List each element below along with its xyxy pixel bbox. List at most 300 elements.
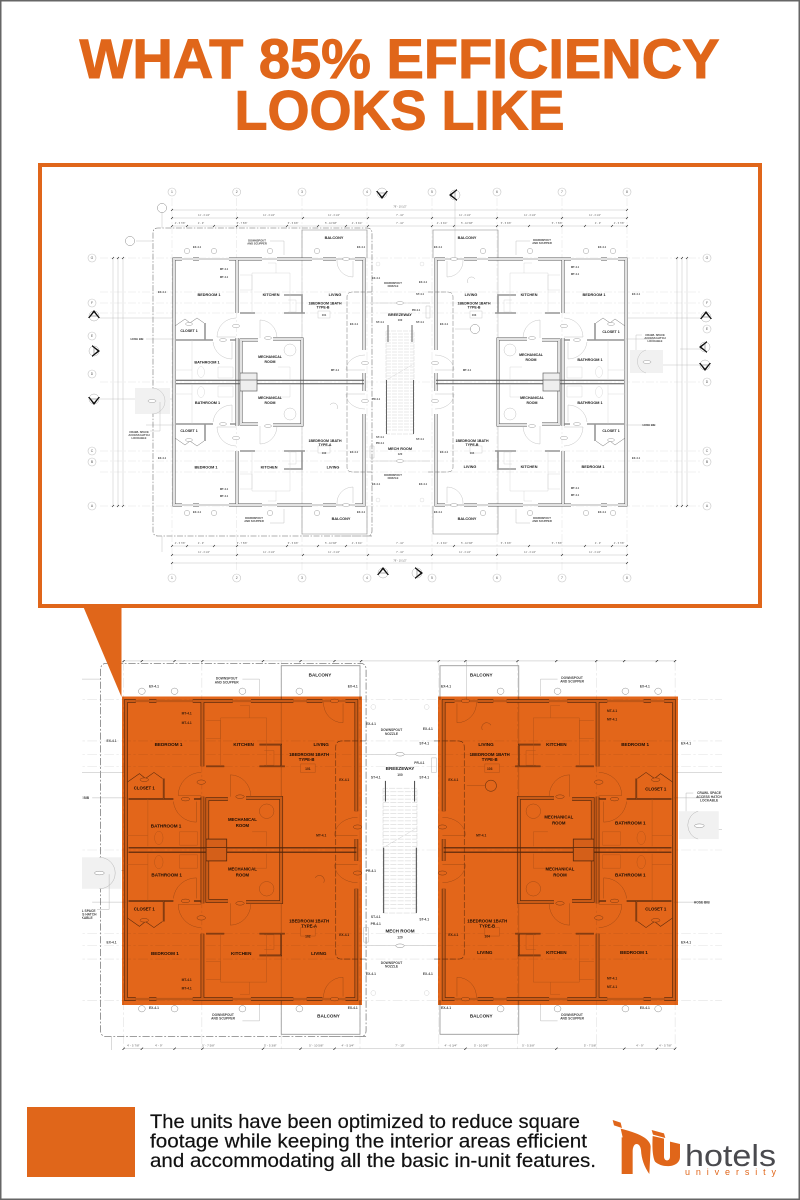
zoomed floor plan text labels: 1BEDROOM 1BATH bbox=[289, 919, 329, 924]
orange highlight: left units bbox=[122, 696, 362, 1005]
zoomed floor plan text labels: BEDROOM 1 bbox=[620, 950, 648, 955]
zoomed floor plan text labels: EX-4.1 bbox=[348, 1006, 358, 1010]
floor plan text labels: NOZZLE bbox=[388, 476, 399, 480]
zoomed floor plan text labels: EX-4.1 bbox=[441, 1006, 451, 1010]
zoomed floor plan text labels: CRAWL SPACE bbox=[72, 909, 96, 913]
zoomed floor plan text labels: MECHANICAL bbox=[228, 867, 257, 872]
floor plan text labels: 4' - 9" bbox=[595, 542, 601, 545]
floor plan text labels: 1 bbox=[171, 576, 173, 580]
floor plan text labels: ACCESS HATCH bbox=[644, 336, 666, 340]
floor plan text labels bbox=[91, 190, 709, 580]
floor plan text labels: EX-4.1 bbox=[434, 510, 443, 514]
floor plan text labels: EX-4.1 bbox=[598, 510, 607, 514]
zoomed floor plan text labels: EX-4.1 bbox=[681, 742, 691, 746]
floor plan text labels: EX-4.1 bbox=[357, 245, 366, 249]
floor plan text labels: EX-4.1 bbox=[632, 456, 641, 460]
zoomed floor plan text labels: 7' - 10" bbox=[395, 1043, 405, 1047]
zoomed floor plan text labels: EX-4.1 bbox=[107, 940, 117, 944]
zoomed floor plan text labels: BATHROOM 1 bbox=[151, 824, 182, 829]
zoomed floor plan text labels: PR-4.1 bbox=[366, 869, 376, 873]
zoomed floor plan text labels: EX-4.1 bbox=[366, 722, 376, 726]
floor plan text labels: 5' - 5 3/8" bbox=[288, 222, 298, 225]
zoomed floor plan text labels: BATHROOM 1 bbox=[615, 821, 646, 826]
floor plan text labels: CLOSET 1 bbox=[602, 429, 620, 433]
floor plan text labels: ROOM bbox=[264, 360, 276, 364]
logo wordmark: hotels bbox=[685, 1138, 776, 1173]
zoomed floor plan text labels: TYPE-B bbox=[482, 757, 498, 762]
zoomed floor plan text labels: MECHANICAL bbox=[544, 814, 574, 819]
zoomed floor plan text labels: 103 bbox=[487, 767, 493, 771]
zoomed floor plan text labels: 120 bbox=[397, 935, 403, 939]
zoomed floor plan text labels: BALCONY bbox=[309, 673, 331, 678]
zoomed floor plan text labels: EX-4.1 bbox=[423, 972, 433, 976]
floor plan text labels: D bbox=[91, 372, 94, 376]
floor plan text labels: EX-4.1 bbox=[158, 456, 167, 460]
zoomed floor plan text labels: BALCONY bbox=[470, 1013, 493, 1018]
zoomed floor plan text labels: BATHROOM 1 bbox=[151, 873, 182, 878]
zoomed floor plan text labels: KITCHEN bbox=[546, 950, 567, 955]
floor plan text labels: LIVING bbox=[465, 293, 477, 297]
zoomed floor plan text labels bbox=[71, 673, 723, 1047]
floor plan text labels: 8 bbox=[626, 190, 628, 194]
callout pointer bbox=[83, 606, 122, 697]
floor plan text labels: 1 bbox=[171, 190, 173, 194]
zoomed floor plan text labels: 101 bbox=[305, 767, 311, 771]
zoomed floor plan text labels: CLOSET 1 bbox=[645, 787, 667, 792]
floor plan text labels: BATHROOM 1 bbox=[194, 360, 220, 364]
floor plan text labels: CRAWL SPACE bbox=[129, 430, 149, 434]
floor plan text labels: 7' - 10" bbox=[396, 214, 404, 217]
zoomed floor plan text labels: KITCHEN bbox=[546, 742, 567, 747]
floor plan text labels: 5' - 5 3/8" bbox=[288, 542, 298, 545]
floor plan text labels: LOCKABLE bbox=[648, 339, 663, 343]
floor plan text labels: EX-4.1 bbox=[372, 276, 381, 280]
floor plan text labels: PR-4.1 bbox=[376, 441, 385, 445]
zoomed floor plan text labels: 4' - 5 7/8" bbox=[127, 1043, 140, 1047]
floor plan text labels: AND SCUPPER bbox=[244, 519, 264, 523]
floor plan text labels: 4 bbox=[366, 576, 368, 580]
zoomed floor plan text labels: MT-4.1 bbox=[182, 721, 192, 725]
title: WHAT 85% EFFICIENCY bbox=[80, 27, 720, 90]
floor plan text labels: 4' - 5 3/4" bbox=[352, 542, 362, 545]
zoomed floor plan text labels: ACCESS HATCH bbox=[696, 795, 723, 799]
floor plan text labels: 11' - 3 1/4" bbox=[328, 214, 340, 217]
floor plan text labels: 4' - 6 3/4" bbox=[437, 222, 447, 225]
floor plan text labels: ST-4.1 bbox=[416, 320, 424, 324]
zoomed floor plan text labels: LOCKABLE bbox=[75, 916, 94, 920]
zoomed floor plan text labels: LOCKABLE bbox=[700, 799, 719, 803]
floor plan text labels: 104 bbox=[470, 451, 475, 455]
zoomed floor plan text labels: BEDROOM 1 bbox=[151, 951, 179, 956]
floor plan text labels: 5' - 5 3/8" bbox=[501, 542, 511, 545]
floor plan text labels: EX-4.1 bbox=[440, 450, 449, 454]
floor plan text labels: PR-4.1 bbox=[372, 397, 381, 401]
zoomed floor plan text labels: MT-4.1 bbox=[182, 986, 192, 990]
floor plan text labels: ST-4.1 bbox=[416, 437, 424, 441]
floor plan text labels: TYPE-B bbox=[465, 443, 479, 447]
floor plan text labels: 79' - 10 1/2" bbox=[393, 206, 407, 208]
floor plan text labels: BEDROOM 1 bbox=[194, 466, 218, 470]
floor plan text labels: 5' - 10 5/8" bbox=[325, 222, 337, 225]
floor plan text labels: A bbox=[706, 504, 709, 508]
zoomed floor plan text labels: MT-4.1 bbox=[607, 717, 617, 721]
floor plan text labels: EX-4.1 bbox=[158, 290, 167, 294]
floor plan text labels: LIVING bbox=[464, 465, 476, 469]
floor plan text labels: NOZZLE bbox=[388, 284, 399, 288]
zoomed floor plan text labels: KITCHEN bbox=[233, 742, 255, 747]
zoomed floor plan text labels: KITCHEN bbox=[231, 951, 252, 956]
floor plan text labels: MT-4.1 bbox=[571, 486, 580, 490]
zoomed floor plan text labels: TYPE-A bbox=[301, 924, 317, 929]
floor plan text labels: BEDROOM 1 bbox=[582, 465, 604, 469]
floor plan text labels: EX-4.1 bbox=[350, 450, 359, 454]
floor plan text labels: 11' - 3 1/4" bbox=[459, 214, 471, 217]
zoomed floor plan text labels: ROOM bbox=[552, 821, 566, 826]
zoomed floor plan text labels: BATHROOM 1 bbox=[615, 873, 646, 878]
zoomed floor plan text labels: ROOM bbox=[236, 823, 250, 828]
floor plan text labels: 101 bbox=[322, 313, 327, 317]
zoomed floor plan text labels: ROOM bbox=[236, 873, 250, 878]
floor plan text labels: EX-4.1 bbox=[350, 322, 359, 326]
zoomed floor plan text labels: MT-4.1 bbox=[607, 985, 617, 989]
floor plan text labels: EX-4.1 bbox=[372, 482, 381, 486]
floor plan text labels: C bbox=[706, 449, 709, 453]
zoomed floor plan text labels: PR-4.1 bbox=[371, 922, 381, 926]
zoomed floor plan text labels: NOZZLE bbox=[385, 965, 399, 969]
floor plan text labels: LIVING bbox=[327, 466, 339, 470]
floor plan text labels: 1BEDROOM 1BATH bbox=[308, 302, 342, 306]
floor plan text labels: 100 bbox=[398, 318, 403, 322]
zoomed floor plan text labels: MT-4.1 bbox=[316, 834, 326, 838]
panel frame: orange outline bbox=[40, 165, 760, 606]
zoomed floor plan text labels: EX-4.1 bbox=[448, 778, 459, 782]
floor plan text labels: EX-4.1 bbox=[193, 510, 202, 514]
floor plan text labels: 5' - 10 5/8" bbox=[325, 542, 337, 545]
zoomed floor plan text labels: ST-4.1 bbox=[419, 917, 429, 921]
floor plan text labels: 11' - 3 1/4" bbox=[328, 551, 340, 554]
floor plan text labels: CLOSET 1 bbox=[180, 429, 198, 433]
zoomed floor plan text labels: HOSE BIB bbox=[694, 900, 710, 904]
floor plan text labels: 1BEDROOM 1BATH bbox=[457, 302, 491, 306]
title bbox=[80, 27, 720, 142]
zoomed floor plan text labels: TYPE-B bbox=[479, 924, 495, 929]
floor plan text labels: 4' - 6 3/4" bbox=[437, 542, 447, 545]
zoomed floor plan text labels: BREEZEWAY bbox=[386, 766, 414, 771]
floor plan text labels: CLOSET 1 bbox=[180, 329, 198, 333]
zoomed floor plan text labels: PR-4.1 bbox=[414, 761, 425, 765]
zoomed floor plan text labels: AND SCUPPER bbox=[211, 1017, 236, 1021]
zoomed floor plan text labels: 102 bbox=[305, 934, 311, 938]
floor plan text labels: AND SCUPPER bbox=[532, 241, 552, 245]
panel: zoomed floor plan with highlighted units bbox=[82, 660, 722, 1050]
zoomed floor plan text labels: DOWNSPOUT bbox=[381, 961, 402, 965]
floor plan text labels: 4' - 9" bbox=[198, 222, 204, 225]
floor plan text labels: 6 bbox=[496, 190, 498, 194]
floor plan text labels: ROOM bbox=[526, 401, 538, 405]
zoomed floor plan text labels: LIVING bbox=[311, 951, 327, 956]
zoomed floor plan text labels: 4' - 6 3/4" bbox=[445, 1043, 457, 1047]
floor plan text labels: MT-4.1 bbox=[331, 368, 340, 372]
floor plan text labels: MT-4.1 bbox=[220, 494, 229, 498]
floor plan text labels: 120 bbox=[398, 452, 403, 456]
floor plan text labels: CLOSET 1 bbox=[602, 330, 620, 334]
zoomed floor plan text labels: CLOSET 1 bbox=[645, 907, 667, 912]
zoomed floor plan text labels: EX-4.1 bbox=[348, 685, 358, 689]
zoomed floor plan text labels: BALCONY bbox=[317, 1013, 340, 1018]
zoomed floor plan text labels: LIVING bbox=[478, 742, 494, 747]
floor plan text labels: 7' - 10" bbox=[396, 542, 404, 545]
floor plan text labels: 5' - 7 5/8" bbox=[237, 542, 247, 545]
zoomed floor plan text labels: EX-4.1 bbox=[423, 727, 433, 731]
floor plan text labels: LIVING bbox=[329, 293, 341, 297]
caption text: footage while keeping the interior areas efficient bbox=[150, 1130, 588, 1152]
floor plan text labels: MT-4.1 bbox=[220, 487, 229, 491]
floor plan text labels: TYPE-B bbox=[316, 306, 330, 310]
floor plan text labels: MECHANICAL bbox=[519, 353, 544, 357]
floor plan text labels: DOWNSPOUT bbox=[384, 281, 402, 285]
floor plan text labels: MT-4.1 bbox=[571, 265, 580, 269]
floor plan text labels: 11' - 3 1/4" bbox=[524, 214, 536, 217]
zoomed floor plan text labels: 5' - 10 5/8" bbox=[474, 1043, 488, 1047]
zoomed floor plan text labels: CLOSET 1 bbox=[134, 907, 155, 912]
floor plan text labels: BATHROOM 1 bbox=[577, 401, 603, 405]
zoomed floor plan text labels: 5' - 10 5/8" bbox=[309, 1043, 324, 1047]
floor plan text labels: 5' - 10 5/8" bbox=[461, 222, 473, 225]
zoomed floor plan text labels: ACCESS HATCH bbox=[71, 912, 97, 916]
zoomed floor plan text labels: EX-4.1 bbox=[339, 933, 349, 937]
floor plan text labels: DOWNSPOUT bbox=[533, 238, 551, 242]
floor plan text labels: KITCHEN bbox=[261, 466, 278, 470]
floor plan text labels: E bbox=[706, 327, 709, 331]
zoomed floor plan text labels: 5' - 7 5/8" bbox=[202, 1043, 215, 1047]
floor plan text labels: EX-4.1 bbox=[419, 280, 428, 284]
floor plan text labels: 3 bbox=[301, 190, 303, 194]
logo mark bbox=[613, 1120, 680, 1174]
zoomed floor plan text labels: AND SCUPPER bbox=[560, 680, 585, 684]
floor plan text labels: 6 bbox=[496, 576, 498, 580]
floor plan text labels: 11' - 3 1/4" bbox=[198, 551, 210, 554]
zoomed floor plan text labels: 4' - 5 3/4" bbox=[342, 1043, 354, 1047]
floor plan text labels: 5' - 7 5/8" bbox=[552, 542, 562, 545]
caption text: and accommodating all the basic in-unit features. bbox=[150, 1150, 596, 1172]
floor plan text labels: AND SCUPPER bbox=[247, 242, 267, 246]
floor plan text labels: F bbox=[706, 301, 708, 305]
floor plan text labels: G bbox=[91, 256, 94, 260]
floor plan text labels: F bbox=[91, 301, 93, 305]
floor plan text labels: 7' - 10" bbox=[396, 222, 404, 225]
floor plan text labels: TYPE-A bbox=[318, 443, 332, 447]
zoomed floor plan text labels: LIVING bbox=[477, 950, 493, 955]
floor plan text labels: 4' - 5 7/8" bbox=[614, 542, 624, 545]
zoomed floor plan text labels: BALCONY bbox=[470, 673, 493, 678]
zoomed floor plan text labels: EX-4.1 bbox=[441, 685, 451, 689]
zoomed floor plan text labels: ST-4.1 bbox=[371, 915, 381, 919]
floor plan text labels: 11' - 3 1/4" bbox=[198, 214, 210, 217]
zoomed floor plan text labels: MT-4.1 bbox=[182, 711, 192, 715]
floor plan text labels: 5 bbox=[431, 576, 433, 580]
floor plan text labels: BALCONY bbox=[325, 236, 344, 240]
floor plan text labels: 5' - 7 5/8" bbox=[552, 222, 562, 225]
floor plan text labels: MT-4.1 bbox=[220, 267, 229, 271]
floor plan text labels: DOWNSPOUT bbox=[245, 516, 263, 520]
floor plan text labels: 4' - 5 7/8" bbox=[175, 542, 185, 545]
zoomed floor plan text labels: TYPE-B bbox=[299, 757, 315, 762]
zoomed floor plan text labels: 4' - 9" bbox=[155, 1043, 163, 1047]
floor plan text labels: 4 bbox=[366, 190, 368, 194]
floor plan text labels: BALCONY bbox=[458, 236, 477, 240]
zoomed floor plan text labels: MT-4.1 bbox=[607, 977, 617, 981]
floor plan text labels: 2 bbox=[236, 190, 238, 194]
floor plan text labels: HOSE BIB bbox=[642, 423, 656, 427]
zoomed floor plan text labels: CLOSET 1 bbox=[134, 785, 155, 790]
floor plan text labels: EX-4.1 bbox=[419, 482, 428, 486]
floor plan text labels: 11' - 3 1/4" bbox=[589, 214, 601, 217]
floor plan text labels: TYPE-B bbox=[467, 306, 481, 310]
legend swatch bbox=[27, 1107, 135, 1177]
zoomed floor plan text labels: EX-4.1 bbox=[448, 933, 459, 937]
zoomed floor plan text labels: EX-4.1 bbox=[107, 739, 117, 743]
floor plan text labels: DOWNSPOUT bbox=[384, 473, 402, 477]
zoomed floor plan text labels: 1BEDROOM 1BATH bbox=[470, 752, 510, 757]
floor plan text labels: ST-4.1 bbox=[376, 320, 384, 324]
zoomed floor plan text labels: AND SCUPPER bbox=[560, 1017, 585, 1021]
zoomed floor plan text labels: MT-4.1 bbox=[182, 978, 192, 982]
zoomed floor plan text labels: DOWNSPOUT bbox=[212, 1013, 234, 1017]
floor plan text labels: B bbox=[91, 460, 94, 464]
floor plan text labels: 79' - 10 1/2" bbox=[393, 560, 407, 562]
floor plan text labels: 103 bbox=[472, 313, 477, 317]
floor plan text labels: EX-4.1 bbox=[598, 245, 607, 249]
zoomed floor plan text labels: 104 bbox=[485, 934, 490, 938]
zoomed floor plan text labels: 1BEDROOM 1BATH bbox=[289, 752, 329, 757]
floor plan text labels: MECHANICAL bbox=[258, 396, 283, 400]
floor plan text labels: G bbox=[706, 256, 709, 260]
zoomed floor plan text labels: ST-4.1 bbox=[419, 775, 429, 779]
floor plan text labels: BREEZEWAY bbox=[388, 313, 412, 317]
zoomed floor plan text labels: BEDROOM 1 bbox=[155, 742, 183, 747]
caption text: The units have been optimized to reduce square bbox=[150, 1111, 580, 1133]
floor plan text labels: KITCHEN bbox=[263, 293, 280, 297]
zoomed floor plan text labels: DOWNSPOUT bbox=[561, 1013, 583, 1017]
zoomed floor plan text labels: MECHANICAL bbox=[228, 817, 257, 822]
floor plan text labels: 5' - 10 5/8" bbox=[461, 542, 473, 545]
zoomed floor plan text labels: EX-4.1 bbox=[339, 778, 349, 782]
floor plan text labels: 102 bbox=[322, 451, 327, 455]
zoomed floor plan text labels: HOSE BIB bbox=[73, 796, 90, 800]
floor plan text labels: BATHROOM 1 bbox=[195, 401, 220, 405]
floor plan text labels: AND SCUPPER bbox=[532, 519, 552, 523]
zoomed floor plan text labels: EX-4.1 bbox=[640, 1006, 650, 1010]
floor plan text labels: HOSE BIB bbox=[130, 337, 144, 341]
floor plan text labels: 5' - 7 5/8" bbox=[237, 222, 247, 225]
zoomed floor plan text labels: LIVING bbox=[314, 742, 329, 747]
floor plan text labels: PR-4.1 bbox=[412, 308, 421, 312]
zoomed floor plan text labels: ST-4.1 bbox=[371, 775, 381, 779]
floor plan text labels: ST-4.1 bbox=[416, 292, 424, 296]
floor plan text labels: A bbox=[91, 504, 94, 508]
floor plan text labels: KITCHEN bbox=[521, 293, 538, 297]
floor plan text labels: 7 bbox=[561, 190, 563, 194]
floor plan text labels: 3 bbox=[301, 576, 303, 580]
floor plan text labels: LOCKABLE bbox=[132, 436, 147, 440]
floor plan text labels: 7 bbox=[561, 576, 563, 580]
floor plan text labels: DOWNSPOUT bbox=[533, 516, 551, 520]
floor plan text labels: EX-4.1 bbox=[440, 322, 449, 326]
panel: full floor plan bbox=[88, 188, 712, 582]
floor plan text labels: B bbox=[706, 460, 709, 464]
zoomed floor plan text labels: 4' - 5 7/8" bbox=[659, 1043, 672, 1047]
zoomed floor plan text labels: DOWNSPOUT bbox=[216, 677, 237, 681]
logo tagline: university bbox=[685, 1167, 776, 1177]
floor plan text labels: EX-4.1 bbox=[357, 510, 366, 514]
zoomed floor plan text labels: EX-4.1 bbox=[366, 972, 376, 976]
floor plan text labels: MT-4.1 bbox=[463, 368, 472, 372]
floor plan text labels: BEDROOM 1 bbox=[582, 293, 606, 297]
zoomed floor plan text labels: MECHANICAL bbox=[546, 867, 575, 872]
floor plan text labels: EX-4.1 bbox=[434, 245, 443, 249]
title: LOOKS LIKE bbox=[234, 78, 564, 142]
floor plan text labels: MECHANICAL bbox=[520, 396, 545, 400]
floor plan text labels: 11' - 3 1/4" bbox=[459, 551, 471, 554]
floor plan text labels: ROOM bbox=[525, 358, 537, 362]
floor plan text labels: 5 bbox=[431, 190, 433, 194]
caption text bbox=[150, 1111, 596, 1172]
zoomed floor plan text labels: EX-4.1 bbox=[149, 685, 159, 689]
zoomed floor plan text labels: 5' - 5 3/8" bbox=[264, 1043, 277, 1047]
floor plan text labels: CRAWL SPACE bbox=[645, 333, 665, 337]
orange highlight: right units bbox=[438, 696, 678, 1005]
floor plan text labels: 4' - 5 7/8" bbox=[175, 222, 185, 225]
floor plan text labels: 1BEDROOM 1BATH bbox=[308, 439, 342, 443]
logo: hotels university bbox=[613, 1120, 776, 1177]
floor plan text labels: C bbox=[91, 449, 94, 453]
floor plan text labels: 11' - 3 1/4" bbox=[263, 551, 275, 554]
zoomed floor plan text labels: AND SCUPPER bbox=[215, 680, 239, 684]
floor plan text labels: E bbox=[91, 334, 94, 338]
floor plan text labels: DOWNSPOUT bbox=[248, 238, 266, 242]
floor plan text labels: ST-4.1 bbox=[376, 435, 384, 439]
zoomed floor plan text labels: 5' - 5 3/8" bbox=[522, 1043, 535, 1047]
floor plan text labels: MECHANICAL bbox=[258, 355, 283, 359]
floor plan text labels: EX-4.1 bbox=[632, 292, 641, 296]
zoomed floor plan text labels: CRAWL SPACE bbox=[697, 791, 722, 795]
floor plan text labels: BATHROOM 1 bbox=[577, 358, 603, 362]
floor plan text labels: 11' - 3 1/4" bbox=[263, 214, 275, 217]
floor plan text labels: 4' - 9" bbox=[595, 222, 601, 225]
floor plan text labels: D bbox=[706, 380, 709, 384]
zoomed floor plan text labels: ST-4.1 bbox=[419, 742, 429, 746]
floor plan text labels: ROOM bbox=[264, 401, 276, 405]
zoomed floor plan text labels: MT-4.1 bbox=[476, 834, 486, 838]
floor plan text labels: 4' - 9" bbox=[198, 542, 204, 545]
floor plan text labels: 8 bbox=[626, 576, 628, 580]
floor plan text labels: MECH ROOM bbox=[388, 447, 412, 451]
floor plan text labels: MT-4.1 bbox=[571, 272, 580, 276]
floor plan text labels: 7' - 10" bbox=[396, 551, 404, 554]
floor plan text labels: 11' - 3 1/4" bbox=[589, 551, 601, 554]
floor plan text labels: BEDROOM 1 bbox=[198, 293, 220, 297]
zoomed floor plan text labels: NOZZLE bbox=[385, 732, 399, 736]
floor plan text labels: 11' - 3 1/4" bbox=[524, 551, 536, 554]
zoomed floor plan text labels: ROOM bbox=[553, 873, 567, 878]
floor plan text labels: ACCESS HATCH bbox=[128, 433, 150, 437]
floor plan text labels: 2 bbox=[236, 576, 238, 580]
floor plan text labels: 1BEDROOM 1BATH bbox=[455, 439, 489, 443]
zoomed floor plan text labels: EX-4.1 bbox=[149, 1006, 159, 1010]
floor plan text labels: 5' - 5 3/8" bbox=[501, 222, 511, 225]
zoomed floor plan text labels: MT-4.1 bbox=[607, 709, 617, 713]
zoomed floor plan text labels: 100 bbox=[397, 773, 403, 777]
